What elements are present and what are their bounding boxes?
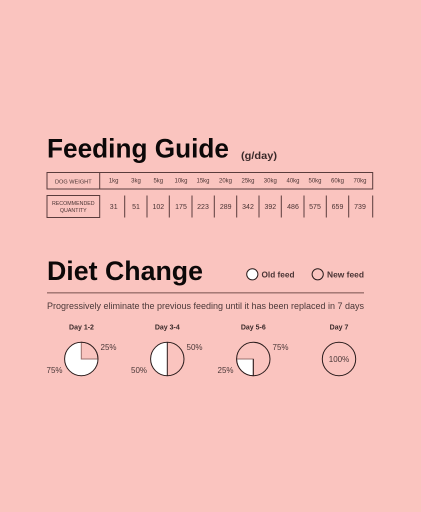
pie: Day 7: 100% xyxy=(329,355,349,364)
pie: Day 3-4: Day 3-4 xyxy=(155,324,180,332)
table row: recommended quantity: 51 xyxy=(132,204,140,211)
pie: Day 1-2: 25% xyxy=(100,343,117,352)
legend: new feed: New feed xyxy=(327,270,364,280)
pie: Day 1-2: 75% xyxy=(46,366,63,375)
table row: dog weight: 25kg xyxy=(241,179,255,185)
table row: recommended quantity: 342 xyxy=(242,204,254,211)
table row: dog weight: 40kg xyxy=(286,179,300,185)
table row: recommended quantity: 31 xyxy=(110,204,118,211)
table row: recommended quantity: 289 xyxy=(220,204,232,211)
unit label: g per day: (g/day) xyxy=(241,150,277,162)
table row: dog weight: DOG WEIGHT xyxy=(55,180,92,186)
pie: Day 1-2: Day 1-2 xyxy=(69,324,94,332)
table row: recommended quantity: 739 xyxy=(354,204,366,211)
table row: dog weight: 3kg xyxy=(131,179,141,185)
pie: Day 5-6 xyxy=(218,324,289,376)
feeding table xyxy=(47,172,373,218)
table row: recommended quantity: 175 xyxy=(175,204,187,211)
pie: Day 3-4: 50% xyxy=(186,343,203,352)
legend: old feed xyxy=(247,269,294,280)
pie: Day 5-6: 75% xyxy=(272,343,289,352)
legend: new feed xyxy=(312,269,364,280)
table row: dog weight: 1kg xyxy=(109,179,119,185)
table row: recommended quantity: 575 xyxy=(309,204,321,211)
pie: Day 7 xyxy=(322,324,356,376)
pie: Day 7: Day 7 xyxy=(330,324,348,332)
pie: Day 5-6: Day 5-6 xyxy=(241,324,266,332)
pie: Day 3-4 xyxy=(131,324,203,376)
table row: recommended quantity: 102 xyxy=(152,204,164,211)
table row: recommended quantity: 223 xyxy=(197,204,209,211)
table row: dog weight: 50kg xyxy=(308,179,322,185)
pie: Day 1-2 xyxy=(46,324,117,376)
title: Feeding Guide: Feeding Guide xyxy=(47,134,229,164)
table row: recommended quantity: 659 xyxy=(332,204,343,211)
table row: dog weight: 15kg xyxy=(196,179,210,185)
table row: dog weight: 5kg xyxy=(153,179,163,185)
table row: recommended quantity xyxy=(47,196,373,218)
table row: recommended quantity: QUANTITY xyxy=(60,208,87,214)
table row: recommended quantity: 392 xyxy=(264,204,276,211)
description text: Progressively eliminate the previous feeding until it has been replaced in 7 days xyxy=(47,301,364,311)
table row: dog weight: 60kg xyxy=(331,179,344,185)
heading: Diet Change: Diet Change xyxy=(47,256,203,286)
pie: Day 5-6: 25% xyxy=(218,366,234,375)
table row: dog weight: 70kg xyxy=(353,179,367,185)
pie: Day 3-4: 50% xyxy=(131,366,147,375)
table row: dog weight xyxy=(47,172,373,189)
table row: recommended quantity: 486 xyxy=(287,204,299,211)
table row: dog weight: 20kg xyxy=(219,179,232,185)
legend: old feed: Old feed xyxy=(262,270,294,280)
table row: dog weight: 30kg xyxy=(264,179,277,185)
table row: recommended quantity: RECOMMENDED xyxy=(52,201,95,207)
table row: dog weight: 10kg xyxy=(174,179,188,185)
